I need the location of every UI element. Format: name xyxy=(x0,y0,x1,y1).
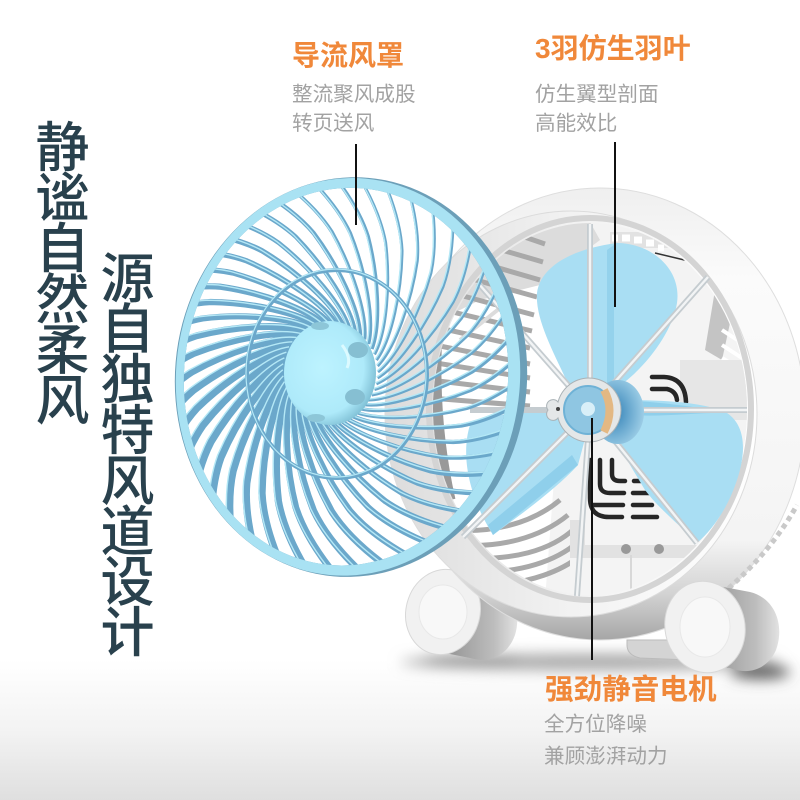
stand foot xyxy=(627,640,690,660)
title line 1: 静谧自然柔风 xyxy=(27,119,87,423)
callout: motor: 兼顾澎湃动力 xyxy=(544,745,668,768)
callout: blades xyxy=(535,33,691,135)
leader line: motor xyxy=(591,418,593,660)
motor housing xyxy=(570,558,577,566)
fan blades xyxy=(466,243,743,543)
left wheel xyxy=(396,561,517,663)
grille middle ring xyxy=(246,269,427,478)
leader line: guide cover xyxy=(355,144,357,225)
callout: motor xyxy=(544,674,717,768)
callout: blades: 3羽仿生羽叶 xyxy=(535,33,691,64)
callout: guide cover: 导流风罩 xyxy=(292,40,404,71)
callout: blades: 仿生翼型剖面 xyxy=(535,83,659,106)
rear cavity with grille xyxy=(430,220,750,600)
right wheel xyxy=(656,574,779,680)
title line 2: 源自独特风道设计 xyxy=(92,250,152,655)
fan body shell xyxy=(385,188,800,640)
callout: blades: 高能效比 xyxy=(535,112,617,135)
motor vents xyxy=(590,377,686,517)
callout: motor: 强劲静音电机 xyxy=(545,674,717,706)
product illustration: fan xyxy=(174,34,800,765)
callout: motor: 全方位降噪 xyxy=(544,713,647,736)
callout: guide cover: 转页送风 xyxy=(292,112,374,135)
callout: guide cover: 整流聚风成股 xyxy=(292,83,416,106)
grille centre cap xyxy=(284,321,376,425)
callout: guide cover xyxy=(292,40,416,135)
front grille: spiral ribs xyxy=(184,188,508,566)
ground shadow xyxy=(400,654,790,679)
grille outer rim xyxy=(158,163,544,592)
front guard spokes xyxy=(463,224,747,596)
motor hub xyxy=(547,378,644,444)
leader line: blade xyxy=(614,142,616,307)
background gradient xyxy=(0,660,800,800)
